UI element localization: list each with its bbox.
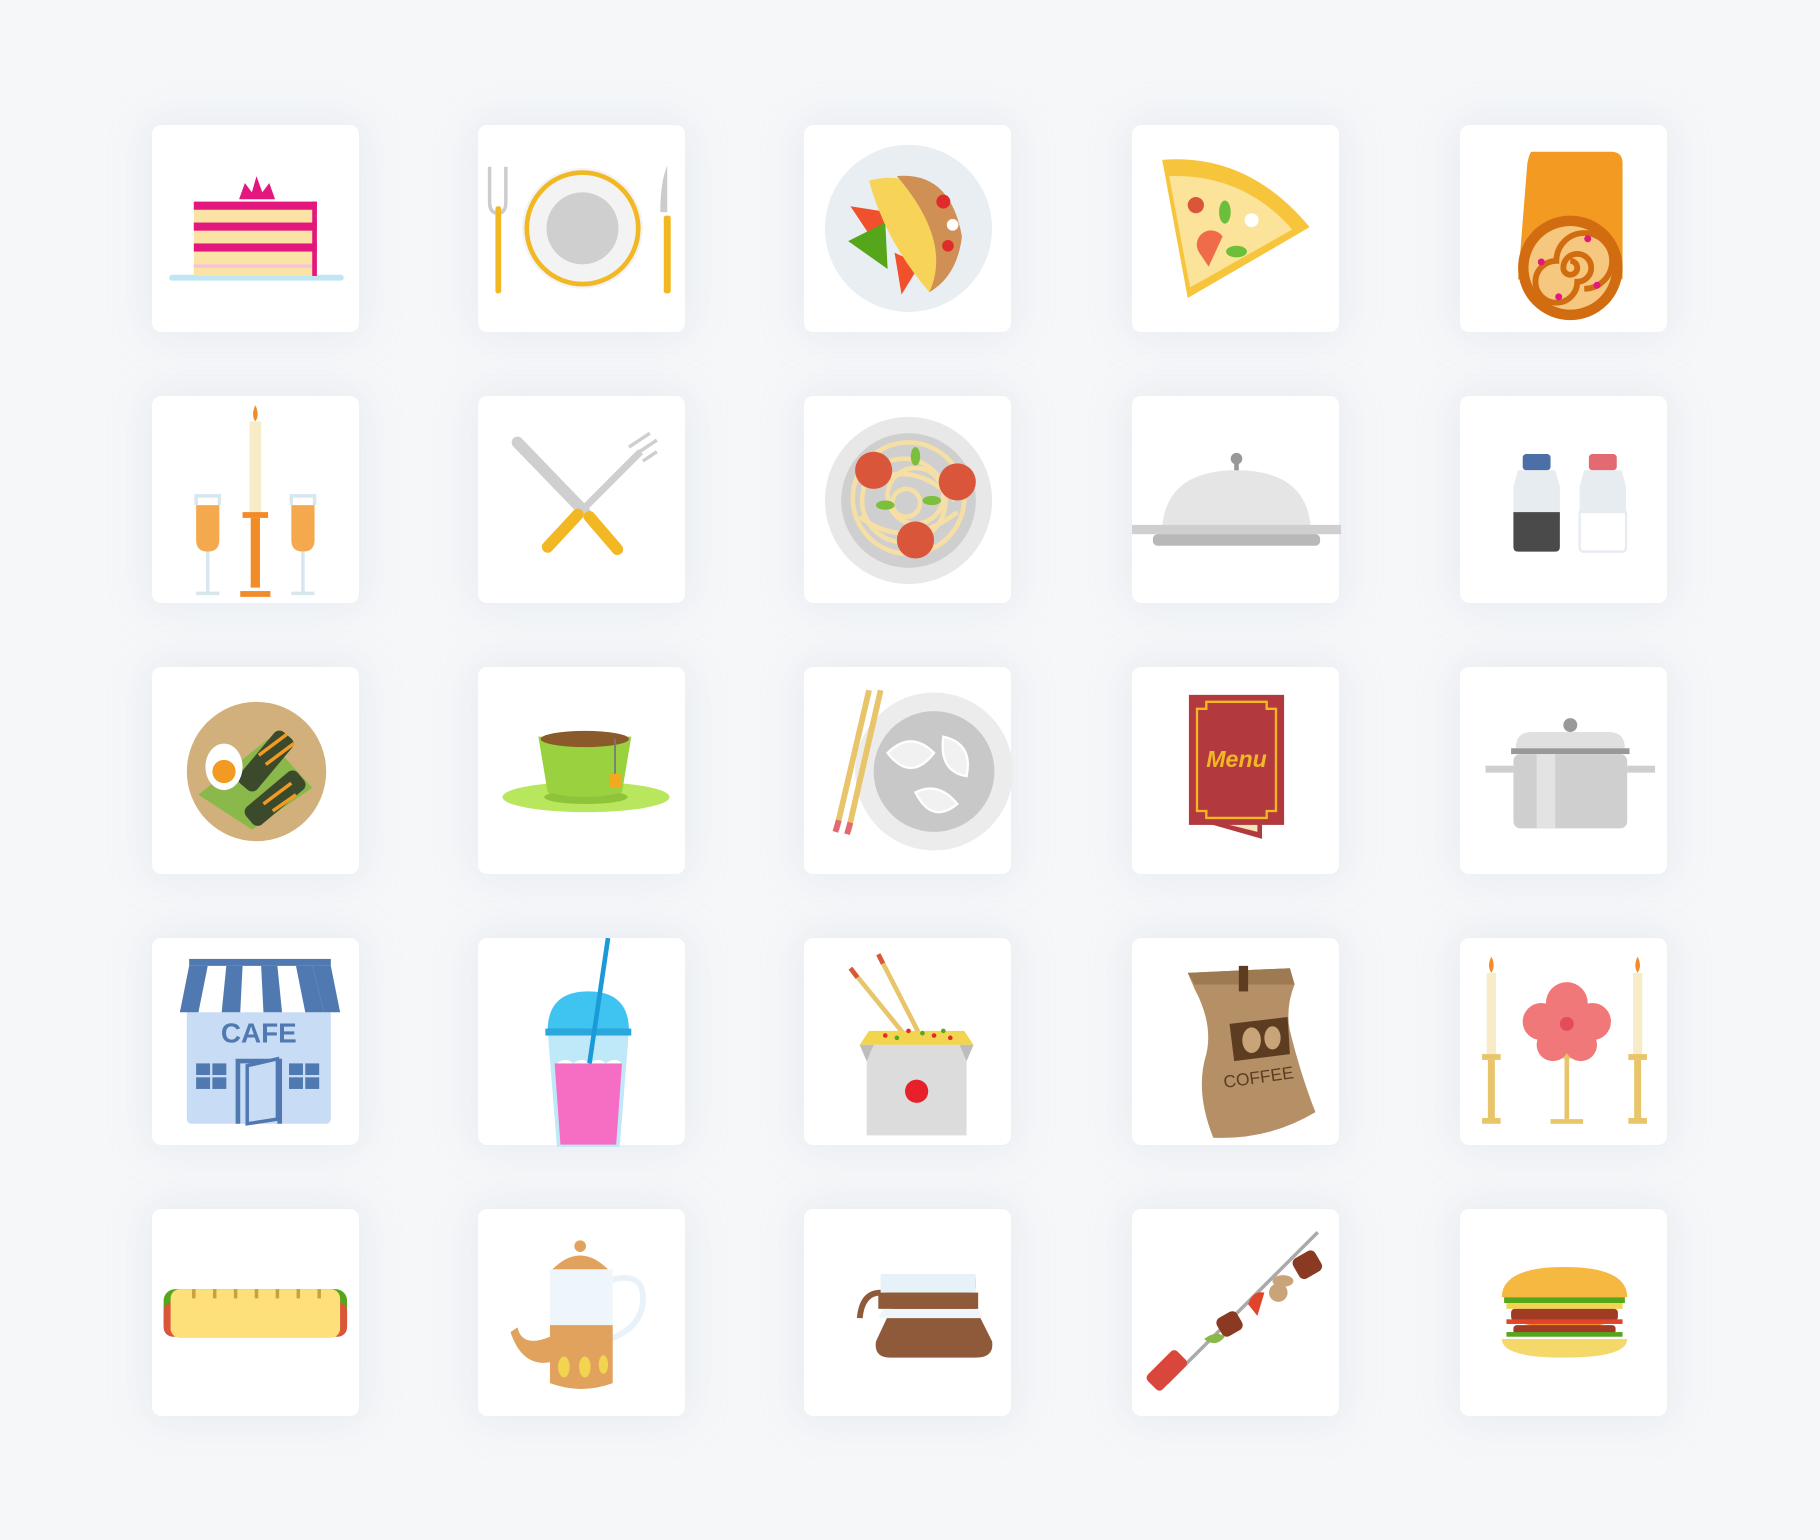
card: coffee pot: [803, 1208, 1012, 1417]
card: cooking pot: [1459, 666, 1668, 875]
card: sandwich: [151, 1208, 360, 1417]
card: plate and cutlery: [477, 124, 686, 333]
card: salad plate: [151, 666, 360, 875]
card: teapot: [477, 1208, 686, 1417]
card: pizza: [1131, 124, 1340, 333]
card: taco: [803, 124, 1012, 333]
card: tea cup: [477, 666, 686, 875]
card: menu: Menu: [1206, 746, 1267, 772]
card: cafe store: [151, 937, 360, 1146]
card: dumplings: [803, 666, 1012, 875]
card: crossed fork and knife: [477, 395, 686, 604]
card: smoothie cup: [477, 937, 686, 1146]
card: coffee bag: COFFEE: [1222, 1062, 1295, 1092]
card: cafe store: CAFE: [221, 1018, 297, 1049]
card: coffee bag: [1131, 937, 1340, 1146]
card: cake: [151, 124, 360, 333]
card: burger: [1459, 1208, 1668, 1417]
card: spaghetti: [803, 395, 1012, 604]
card: menu: [1131, 666, 1340, 875]
card: candles and flowers: [1459, 937, 1668, 1146]
card: roll cake: [1459, 124, 1668, 333]
card: candle and glasses: [151, 395, 360, 604]
card: salt and pepper: [1459, 395, 1668, 604]
card: cloche: [1131, 395, 1340, 604]
card: noodle box: [803, 937, 1012, 1146]
card: kebab: [1131, 1208, 1340, 1417]
